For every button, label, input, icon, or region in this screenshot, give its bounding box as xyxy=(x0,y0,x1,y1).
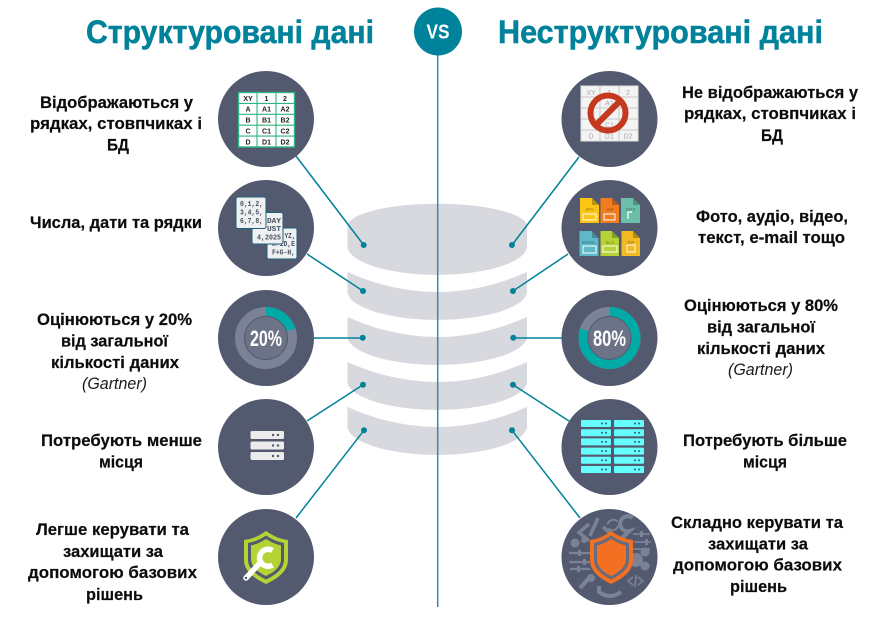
icon: structured table: B1 xyxy=(262,118,271,124)
text: left row 5 xyxy=(28,520,198,604)
text: right row 5: допомогою базових xyxy=(673,556,843,574)
text: right row 3: від загальної xyxy=(707,318,816,336)
text: left row 1: БД xyxy=(107,136,129,154)
icon: structured table xyxy=(218,71,314,167)
icon: structured table: C xyxy=(245,128,251,136)
VS badge xyxy=(414,8,462,56)
icon: structured table: XY xyxy=(243,96,253,103)
icon: 20 percent donut: 20% xyxy=(250,326,282,351)
icon: structured table: B xyxy=(245,118,251,124)
text: right row 4: Потребують більше xyxy=(683,431,847,450)
icon: lime shield with wrench xyxy=(218,509,314,605)
icon: structured table: B2 xyxy=(281,118,290,124)
icon: crossed-out table: D xyxy=(588,134,594,140)
icon: crossed-out table: 2 xyxy=(626,90,630,97)
text: left row 4 xyxy=(41,431,202,472)
text: left row 2: Числа, дати та рядки xyxy=(30,213,202,232)
icon: crossed-out table: A1 xyxy=(605,100,614,108)
icon: numbers, dates and strings cards xyxy=(218,180,314,276)
text: right row 5: Складно керувати та xyxy=(671,513,844,532)
icon: numbers, dates and strings cards: YZ, xyxy=(284,233,296,241)
text: right row 1: Не відображаються у xyxy=(682,83,859,102)
text: right row 5 xyxy=(671,513,844,596)
text: left row 5: захищати за xyxy=(63,542,164,561)
database cylinder xyxy=(348,204,527,455)
text: left row 4: Потребують менше xyxy=(41,431,202,450)
icon: structured table: D1 xyxy=(262,140,271,146)
text: right row 1: рядках, стовпчиках і xyxy=(684,104,856,123)
heading: unstructured data: Неструктуровані дані xyxy=(498,14,823,50)
connector lines and dots: left xyxy=(296,156,367,518)
icon: numbers, dates and strings cards: H+ID,E xyxy=(272,241,295,249)
icon: numbers, dates and strings cards: F+G-H, xyxy=(272,250,295,258)
icon: small server stack xyxy=(218,399,314,495)
icon: structured table: D xyxy=(245,140,251,146)
icon: structured table: A2 xyxy=(281,106,290,114)
icon: crossed-out table: D1 xyxy=(605,134,614,140)
icon: file types: JPG xyxy=(585,207,594,212)
icon: numbers, dates and strings cards: 0,1,2, xyxy=(240,201,263,209)
icon: structured table: A1 xyxy=(262,106,271,114)
text: left row 1 xyxy=(30,93,202,154)
icon: structured table: C2 xyxy=(281,128,290,136)
text: left row 1: Відображаються у xyxy=(40,93,194,112)
icon: crossed-out table: D2 xyxy=(624,134,633,140)
text: right row 2: текст, e-mail тощо xyxy=(698,228,845,247)
icon: structured table: C1 xyxy=(262,128,271,136)
icon: crossed-out table: XY xyxy=(586,90,596,97)
text: left row 5: допомогою базових xyxy=(28,563,198,582)
icon: numbers, dates and strings cards: 4,2025 xyxy=(257,234,281,242)
text: left row 4: місця xyxy=(99,452,143,472)
icon: large server stack xyxy=(562,399,658,495)
text: left row 5: Легше керувати та xyxy=(36,520,190,539)
text: right row 2 xyxy=(696,207,848,247)
text: left row 3 xyxy=(37,310,192,393)
icon: orange shield over complex tools xyxy=(562,509,658,605)
text: right row 4 xyxy=(683,431,847,472)
text: left row 3: від загальної xyxy=(61,332,169,350)
text: right row 1 xyxy=(682,83,859,145)
text: left row 3: кількості даних xyxy=(51,353,180,372)
icon: file types: MP3 xyxy=(626,207,636,212)
text: left row 1: рядках, стовпчиках і xyxy=(30,114,202,133)
text: right row 3 xyxy=(684,296,838,379)
centre divider line xyxy=(437,50,439,607)
icon: file types: XLS xyxy=(605,240,614,245)
icon: structured table: D2 xyxy=(281,140,290,146)
text: right row 1: БД xyxy=(761,126,783,145)
text: left row 3: (Gartner) xyxy=(82,374,147,393)
heading: structured data: Структуровані дані xyxy=(86,14,374,50)
text: right row 5: рішень xyxy=(730,577,787,596)
icon: 80 percent donut: 80% xyxy=(593,326,626,351)
icon: numbers, dates and strings cards: 3,4,5, xyxy=(240,210,263,218)
icon: file types: AVI xyxy=(606,207,613,212)
text: right row 4: місця xyxy=(743,452,787,472)
icon: 80 percent donut xyxy=(562,290,658,386)
icon: crossed-out table xyxy=(562,71,658,167)
icon: numbers, dates and strings cards: 6,7,8, xyxy=(240,218,263,226)
VS badge: VS xyxy=(426,22,450,44)
text: right row 3: кількості даних xyxy=(697,339,826,358)
text: right row 3: (Gartner) xyxy=(728,360,793,379)
icon: structured table: 2 xyxy=(283,96,287,103)
text: right row 2: Фото, аудіо, відео, xyxy=(696,207,848,226)
icon: numbers, dates and strings cards: DAY xyxy=(267,218,282,226)
icon: file types: ZIP xyxy=(627,240,634,245)
text: left row 3: Оцінюються у 20% xyxy=(37,310,192,329)
icon: numbers, dates and strings cards: UST xyxy=(267,226,282,234)
connector lines and dots: right xyxy=(509,157,580,518)
icon: structured table: A xyxy=(245,106,251,114)
icon: crossed-out table: 1 xyxy=(608,90,612,97)
text: right row 3: Оцінюються у 80% xyxy=(684,296,838,315)
text: left row 5: рішень xyxy=(86,585,143,604)
icon: file types: EMAIL xyxy=(582,240,596,245)
icon: crossed-out table: C1 xyxy=(605,122,614,130)
icon: file types xyxy=(562,180,658,276)
icon: 20 percent donut xyxy=(218,290,314,386)
icon: structured table: 1 xyxy=(265,96,269,103)
text: right row 5: захищати за xyxy=(708,534,809,554)
